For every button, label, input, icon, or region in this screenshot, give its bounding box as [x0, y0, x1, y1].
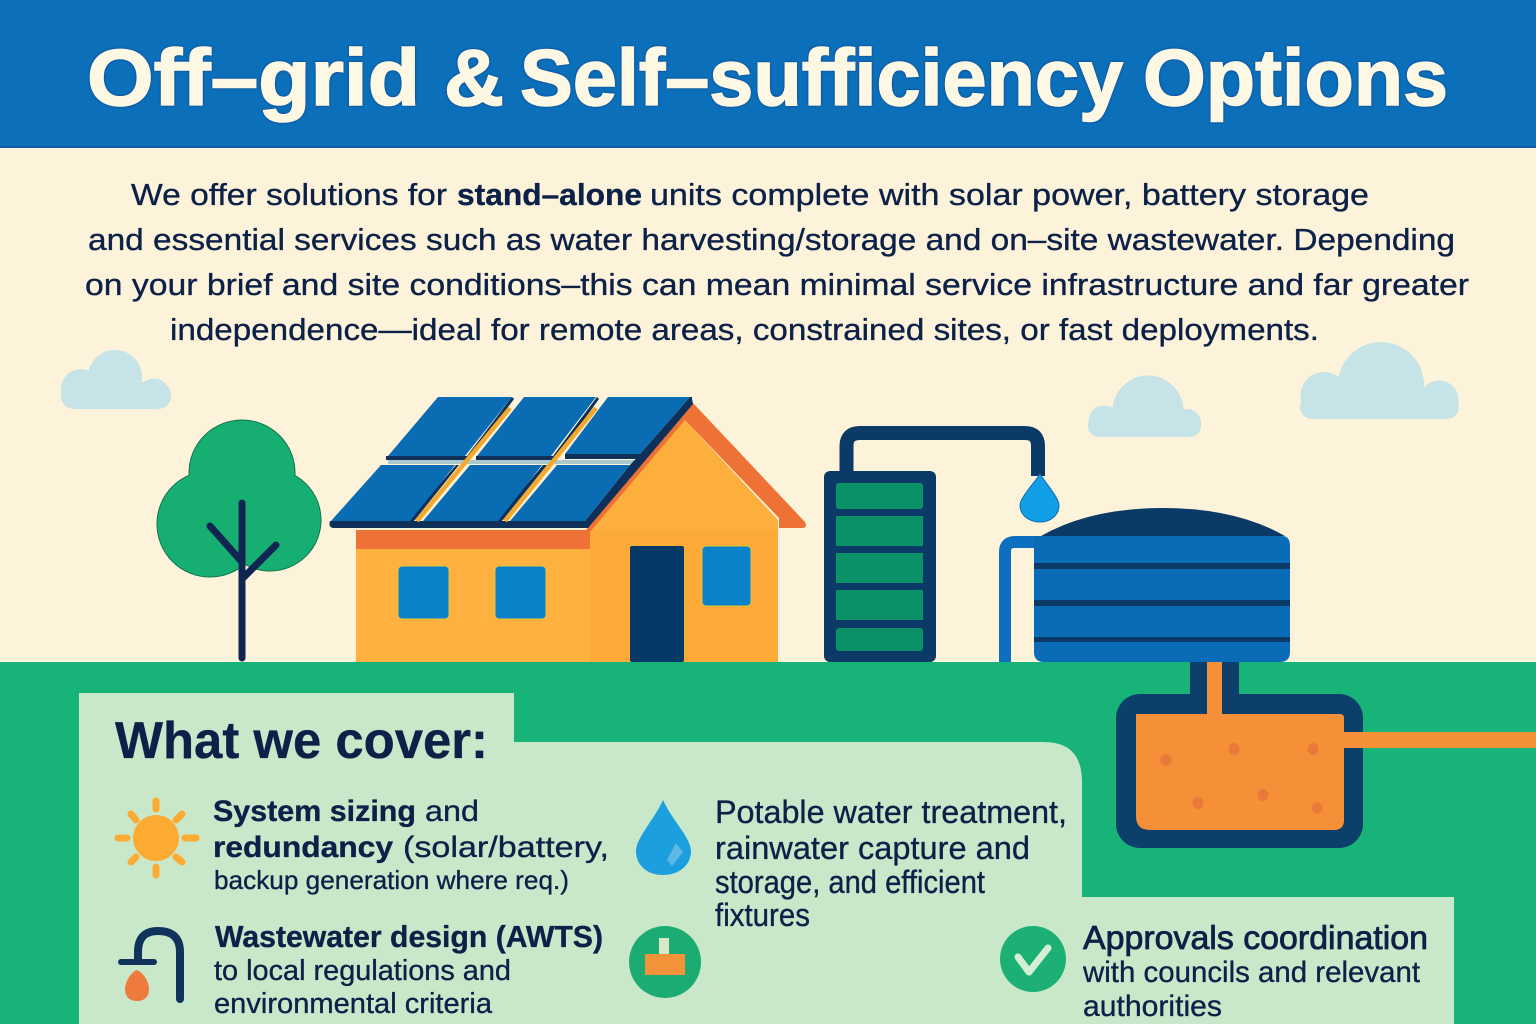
water tank — [1005, 508, 1290, 662]
icon: check — [1000, 926, 1066, 992]
house — [329, 397, 806, 662]
orange fascia — [356, 530, 590, 549]
icon: green circle with tank — [629, 926, 701, 998]
text: wastewater: Wastewater design (AWTS) — [215, 919, 603, 954]
title: & — [444, 33, 504, 122]
text: wastewater — [214, 919, 603, 1020]
text: system sizing: and — [425, 795, 479, 828]
orange gable roof — [586, 402, 806, 532]
mounting rails — [417, 408, 596, 521]
text: system sizing: (solar/battery, — [403, 831, 609, 864]
intro paragraph: independence—ideal for remote areas, constrained sites, or fast deployments. — [170, 312, 1319, 347]
solar array — [329, 397, 693, 528]
dark panel edges — [329, 397, 693, 528]
cloud right — [1300, 342, 1459, 420]
cloud left — [61, 350, 171, 410]
icon: water drop — [636, 800, 691, 875]
septic tank — [1116, 662, 1536, 848]
solar panels — [331, 397, 690, 521]
text: system sizing: redundancy — [213, 831, 393, 864]
text: potable water: fixtures — [715, 897, 810, 933]
intro paragraph: stand–alone — [457, 177, 642, 212]
panel: what we cover — [79, 693, 1454, 1024]
text: potable water: storage, and efficient — [715, 864, 985, 900]
intro paragraph: units complete with solar power, battery storage — [650, 177, 1369, 212]
icon: sun — [118, 801, 196, 875]
title: Options — [1143, 33, 1448, 122]
intro paragraph: on your brief and site conditions–this can mean minimal service infrastructure and far greater — [85, 267, 1469, 302]
house walls — [356, 420, 778, 662]
cloud middle — [1088, 375, 1201, 437]
text: potable water — [715, 794, 1067, 933]
battery stack — [824, 433, 1038, 662]
water drop from pipe — [1020, 474, 1059, 522]
icon: tap — [118, 931, 180, 1001]
text: approvals: authorities — [1083, 990, 1222, 1023]
title: Self–sufficiency — [520, 33, 1124, 122]
heading: What we cover: — [115, 712, 488, 770]
tree — [157, 420, 321, 658]
text: approvals: Approvals coordination — [1083, 919, 1428, 956]
text: wastewater: environmental criteria — [214, 988, 493, 1020]
text: approvals — [1082, 919, 1428, 1023]
text: potable water: Potable water treatment, — [715, 794, 1067, 830]
text: wastewater: to local regulations and — [214, 955, 511, 987]
title: Off–grid — [87, 33, 420, 122]
text: approvals: with councils and relevant — [1082, 956, 1421, 989]
intro paragraph: and essential services such as water harvesting/storage and on–site wastewater. Depending — [88, 222, 1455, 257]
text: system sizing: System sizing — [213, 795, 416, 828]
intro paragraph: We offer solutions for — [131, 177, 447, 212]
title — [87, 33, 1448, 122]
ground — [0, 662, 1536, 1024]
intro paragraph — [85, 177, 1469, 347]
windows — [398, 546, 751, 619]
text: system sizing — [213, 795, 609, 895]
text: system sizing: backup generation where req.) — [214, 865, 569, 895]
header banner — [0, 0, 1536, 148]
text: potable water: rainwater capture and — [715, 830, 1030, 866]
door — [630, 546, 684, 662]
